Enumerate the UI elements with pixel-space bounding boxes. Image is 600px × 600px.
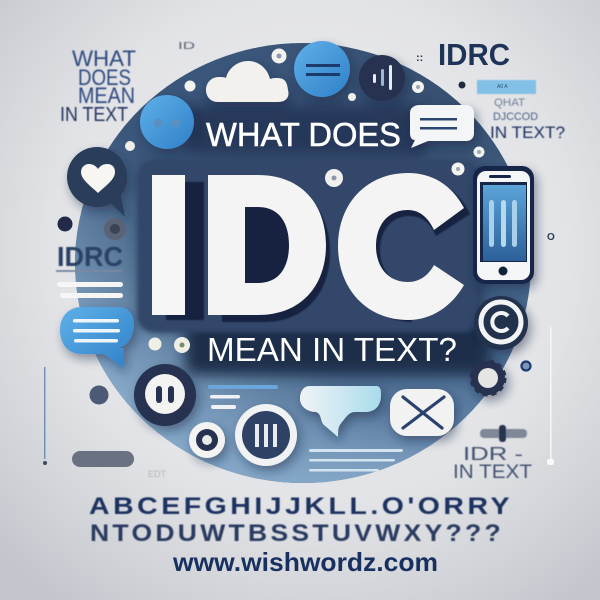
icon: bars button [235, 404, 297, 466]
thin vertical line left [43, 367, 47, 465]
icon: copyright button [474, 296, 528, 350]
icon: speech bubble [410, 105, 474, 148]
lines under IDRC [56, 270, 123, 298]
icon: target button [189, 422, 225, 458]
alphabet rows: NTODUWTBSSTUVWXY??? [90, 520, 504, 547]
label: what did in text, top right: DJCCOD [493, 111, 538, 123]
icon: blue menu button [294, 41, 350, 97]
slider icon [480, 425, 527, 442]
label: what does mean in text, top left: IN TEXT [60, 104, 128, 126]
letter D [208, 175, 326, 315]
label: small ID: ID [178, 41, 195, 52]
label: EDT: EDT [148, 469, 167, 479]
lines: rows under speech cloud [309, 449, 403, 472]
icon: pale speech cloud [300, 386, 381, 437]
pill left [72, 451, 134, 467]
label: what does mean in text, top left: DOES [78, 65, 131, 90]
icon: blue chat bubble [60, 307, 134, 368]
icon: blue chat button [140, 95, 194, 149]
dot left [90, 386, 108, 404]
icon: close button [390, 389, 454, 436]
blue tag [477, 80, 536, 94]
small ring right [522, 362, 530, 370]
icon: dark dot by blue tag [458, 82, 466, 88]
small dark dot [58, 216, 72, 232]
label: what did in text, top right [490, 97, 565, 142]
alphabet rows: ABCEFGHIJJKLL.O'ORRY [89, 493, 513, 520]
icon: heart bubble [67, 147, 127, 217]
lines: text rows near bars button [208, 385, 278, 409]
heading: mean in text: MEAN IN TEXT? [207, 331, 457, 368]
letter C [338, 173, 464, 320]
icon: phone [473, 166, 534, 284]
panel: letter backing [138, 160, 478, 332]
label: ID R in text, lower right [453, 444, 532, 483]
big letters: IDC [152, 173, 470, 322]
label: what does mean in text, top left: WHAT [72, 46, 136, 71]
decorative dots on disc [104, 48, 484, 353]
label: what does mean in text, top left: MEAN [78, 83, 135, 108]
central disc [75, 43, 531, 483]
alphabet rows [89, 493, 513, 547]
label: what does mean in text, top left [60, 46, 136, 126]
heading: what does: WHAT DOES [206, 116, 401, 153]
label: ID R in text, lower right: IDR - [463, 444, 523, 464]
icon: gear [471, 361, 505, 395]
website url: www.wishwordz.com [172, 547, 438, 577]
label: IDRC top right: IDRC [438, 37, 510, 72]
label: IDRC left: IDRC [57, 241, 123, 272]
icon: pause button [134, 364, 196, 426]
panel: dark backing for heading and letters [140, 105, 490, 375]
icon: signal button [359, 55, 405, 101]
label: ID R in text, lower right: IN TEXT [453, 462, 532, 483]
letter I [152, 175, 185, 315]
thin vertical line right [547, 327, 554, 465]
icon: cloud [206, 61, 289, 102]
label: what did in text, top right: IN TEXT? [490, 123, 565, 142]
small ring glyph: O [547, 232, 555, 243]
letter shadow [166, 178, 470, 322]
label: what did in text, top right: QHAT [494, 97, 525, 109]
blue tag: A0 A [497, 84, 508, 90]
icon: small marks beside IDRC: :: [416, 52, 423, 64]
